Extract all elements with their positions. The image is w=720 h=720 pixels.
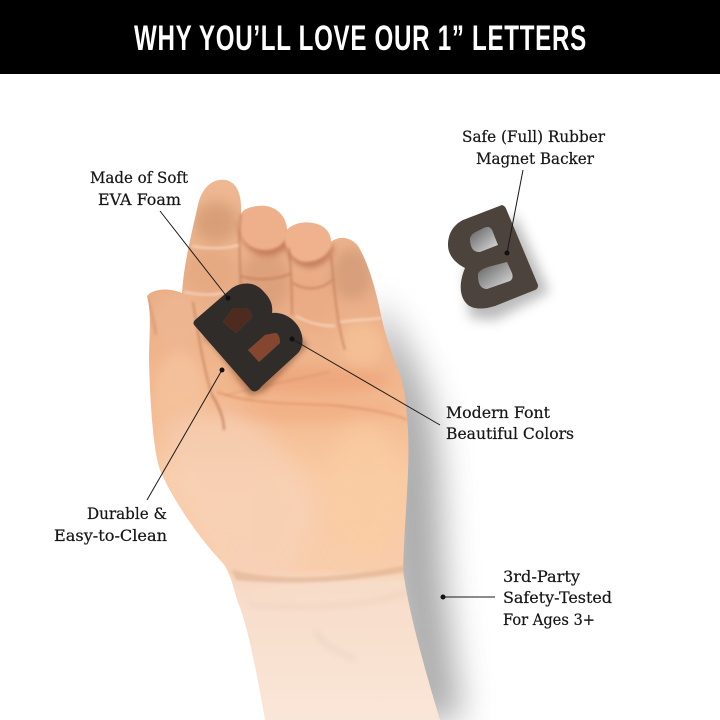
wrist crease shade — [232, 566, 404, 583]
skin tone zones — [156, 200, 384, 422]
photo: child's hand holding letter — [147, 180, 440, 720]
callout: made of soft EVA foam: EVA Foam — [98, 190, 181, 209]
magnet-backed B shadow and letter — [448, 205, 549, 320]
callout: safe rubber magnet backer: Safe (Full) Rubber — [462, 127, 605, 146]
fingertip pads — [238, 206, 287, 250]
callout: safe rubber magnet backer: Magnet Backer — [476, 149, 594, 168]
callout: durable and easy to clean: Easy-to-Clean — [54, 526, 167, 545]
callout: modern font, beautiful colors: Modern Font — [446, 403, 551, 422]
callout: modern font, beautiful colors: Beautiful Colors — [446, 424, 574, 443]
title banner — [0, 0, 720, 74]
hand cast shadow — [372, 300, 462, 720]
callout: made of soft EVA foam — [90, 168, 230, 300]
callout: third-party safety-tested: 3rd-Party — [503, 567, 580, 586]
callout: third-party safety-tested: For Ages 3+ — [503, 610, 595, 629]
finger separations and creases — [147, 214, 407, 430]
heel of hand — [329, 420, 401, 560]
callout: third-party safety-tested: Safety-Tested — [503, 588, 612, 607]
callout: made of soft EVA foam: Made of Soft — [90, 168, 189, 187]
letter B foam, front — [194, 283, 308, 396]
callout: durable and easy to clean: Durable & — [87, 504, 167, 523]
callout: safe rubber magnet backer — [462, 127, 605, 256]
fingertip pad shadows — [238, 222, 290, 256]
callout: third-party safety-tested — [440, 567, 612, 629]
callout: durable and easy to clean — [54, 368, 224, 545]
callout: modern font, beautiful colors — [290, 336, 574, 443]
title text: WHY YOU’LL LOVE OUR 1” LETTERS — [134, 20, 586, 58]
thenar mound — [166, 403, 312, 570]
